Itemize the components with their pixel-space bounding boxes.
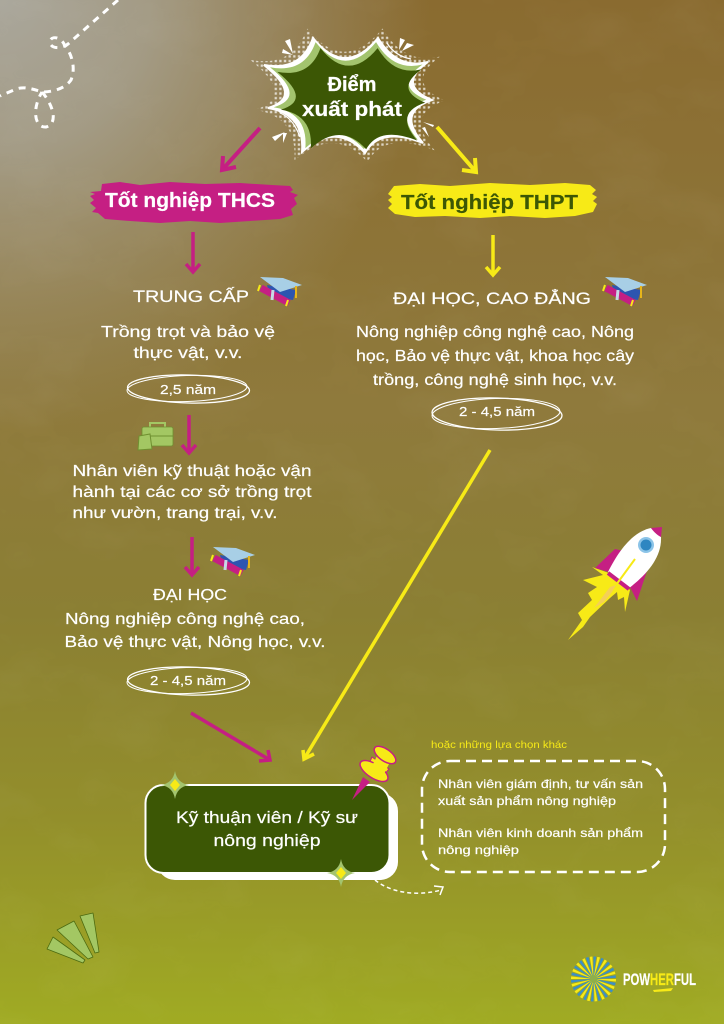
duration pill: 2,5 nam: 2,5 năm xyxy=(160,382,216,397)
icon: graduation cap 2 xyxy=(211,547,255,576)
left column: technical staff: Nhân viên kỹ thuật hoặc vận xyxy=(72,463,312,480)
left column: university: Bảo vệ thực vật, Nông học, v.v. xyxy=(64,634,326,651)
panel: other options: nông nghiệp xyxy=(438,843,519,857)
icon: push pin xyxy=(352,743,399,800)
heading: THPT: Tốt nghiệp THPT xyxy=(401,192,578,214)
panel: result: Kỹ thuận viên / Kỹ sư xyxy=(176,808,358,827)
panel: result xyxy=(146,785,398,880)
nose xyxy=(651,527,662,537)
left column: trung cap: Trồng trọt và bảo vệ xyxy=(101,324,275,341)
left column: technical staff xyxy=(72,463,312,522)
arrow: to staff xyxy=(182,415,196,453)
burst speed arcs xyxy=(280,43,411,137)
burst light crescent xyxy=(270,42,426,149)
heading: THPT xyxy=(388,183,597,218)
burst title: Điểm xyxy=(328,74,376,96)
duration pill: 2,5 nam xyxy=(127,373,250,405)
left column: trung cap xyxy=(101,287,275,362)
rocket xyxy=(568,527,662,640)
icon: green fan xyxy=(47,913,99,963)
duration pill: right 2-4,5: 2 - 4,5 năm xyxy=(459,404,535,419)
arrow: to university xyxy=(185,537,199,575)
panel: other options xyxy=(422,761,665,872)
right column: university, college: ĐẠI HỌC, CAO ĐẲNG xyxy=(393,289,591,308)
icon: graduation cap 3 xyxy=(603,277,647,306)
arrow: THCS down xyxy=(186,232,200,272)
halftone dots xyxy=(250,29,445,162)
heading: THCS: Tốt nghiệp THCS xyxy=(105,190,275,212)
burst title xyxy=(302,74,402,121)
arrow: dashed to options xyxy=(375,880,443,895)
fins xyxy=(595,549,624,572)
arrow: start to THPT xyxy=(437,127,476,172)
arrow: THPT down xyxy=(486,235,500,275)
left column: trung cap: TRUNG CẤP xyxy=(133,287,249,306)
left column: technical staff: như vườn, trang trại, v.v. xyxy=(72,505,278,522)
sparkle 2 xyxy=(327,859,355,887)
burst dark fill xyxy=(277,48,425,149)
panel: result: nông nghiệp xyxy=(214,831,320,850)
right column: university, college: học, Bảo vệ thực vật, khoa học cây xyxy=(356,348,634,365)
starting point burst xyxy=(250,29,445,162)
right column: university, college: trồng, công nghệ sinh học, v.v. xyxy=(373,372,617,389)
dashed trail decoration xyxy=(0,0,118,127)
right column: university, college xyxy=(356,289,634,389)
arrow: magenta to result xyxy=(191,713,270,761)
duration pill: left 2-4,5 xyxy=(127,665,250,697)
panel: other options: Nhân viên kinh doanh sản phẩm xyxy=(438,826,643,840)
options label: hoặc những lựa chọn khác xyxy=(431,739,567,751)
left column: university: ĐẠI HỌC xyxy=(153,587,227,604)
left column: university: Nông nghiệp công nghệ cao, xyxy=(65,611,305,628)
logo: wordmark: POWHERFUL xyxy=(623,971,696,989)
left column: technical staff: hành tại các cơ sở trồng trọt xyxy=(72,484,312,501)
arrow: start to THCS xyxy=(222,128,260,170)
icon: graduation cap 1 xyxy=(258,277,302,306)
body xyxy=(608,528,661,589)
sparkle 1 xyxy=(161,771,189,799)
panel: other options: Nhân viên giám định, tư vấn sản xyxy=(438,777,643,791)
burst title: xuất phát xyxy=(302,99,402,121)
arrow: long yellow to result xyxy=(303,450,490,759)
right column: university, college: Nông nghiệp công nghệ cao, Nông xyxy=(356,324,634,341)
panel: other options: xuất sản phẩm nông nghiệp xyxy=(438,794,616,808)
heading: THCS xyxy=(90,182,298,223)
left column: university xyxy=(64,587,326,651)
burst spikes xyxy=(272,38,434,143)
burst outline xyxy=(264,38,432,153)
logo: sunburst xyxy=(582,968,605,990)
left column: trung cap: thực vật, v.v. xyxy=(134,345,242,362)
flame xyxy=(568,567,630,640)
icon: briefcase xyxy=(138,423,173,450)
porthole xyxy=(638,537,654,553)
duration pill: right 2-4,5 xyxy=(432,396,562,432)
duration pill: left 2-4,5: 2 - 4,5 năm xyxy=(150,673,226,688)
